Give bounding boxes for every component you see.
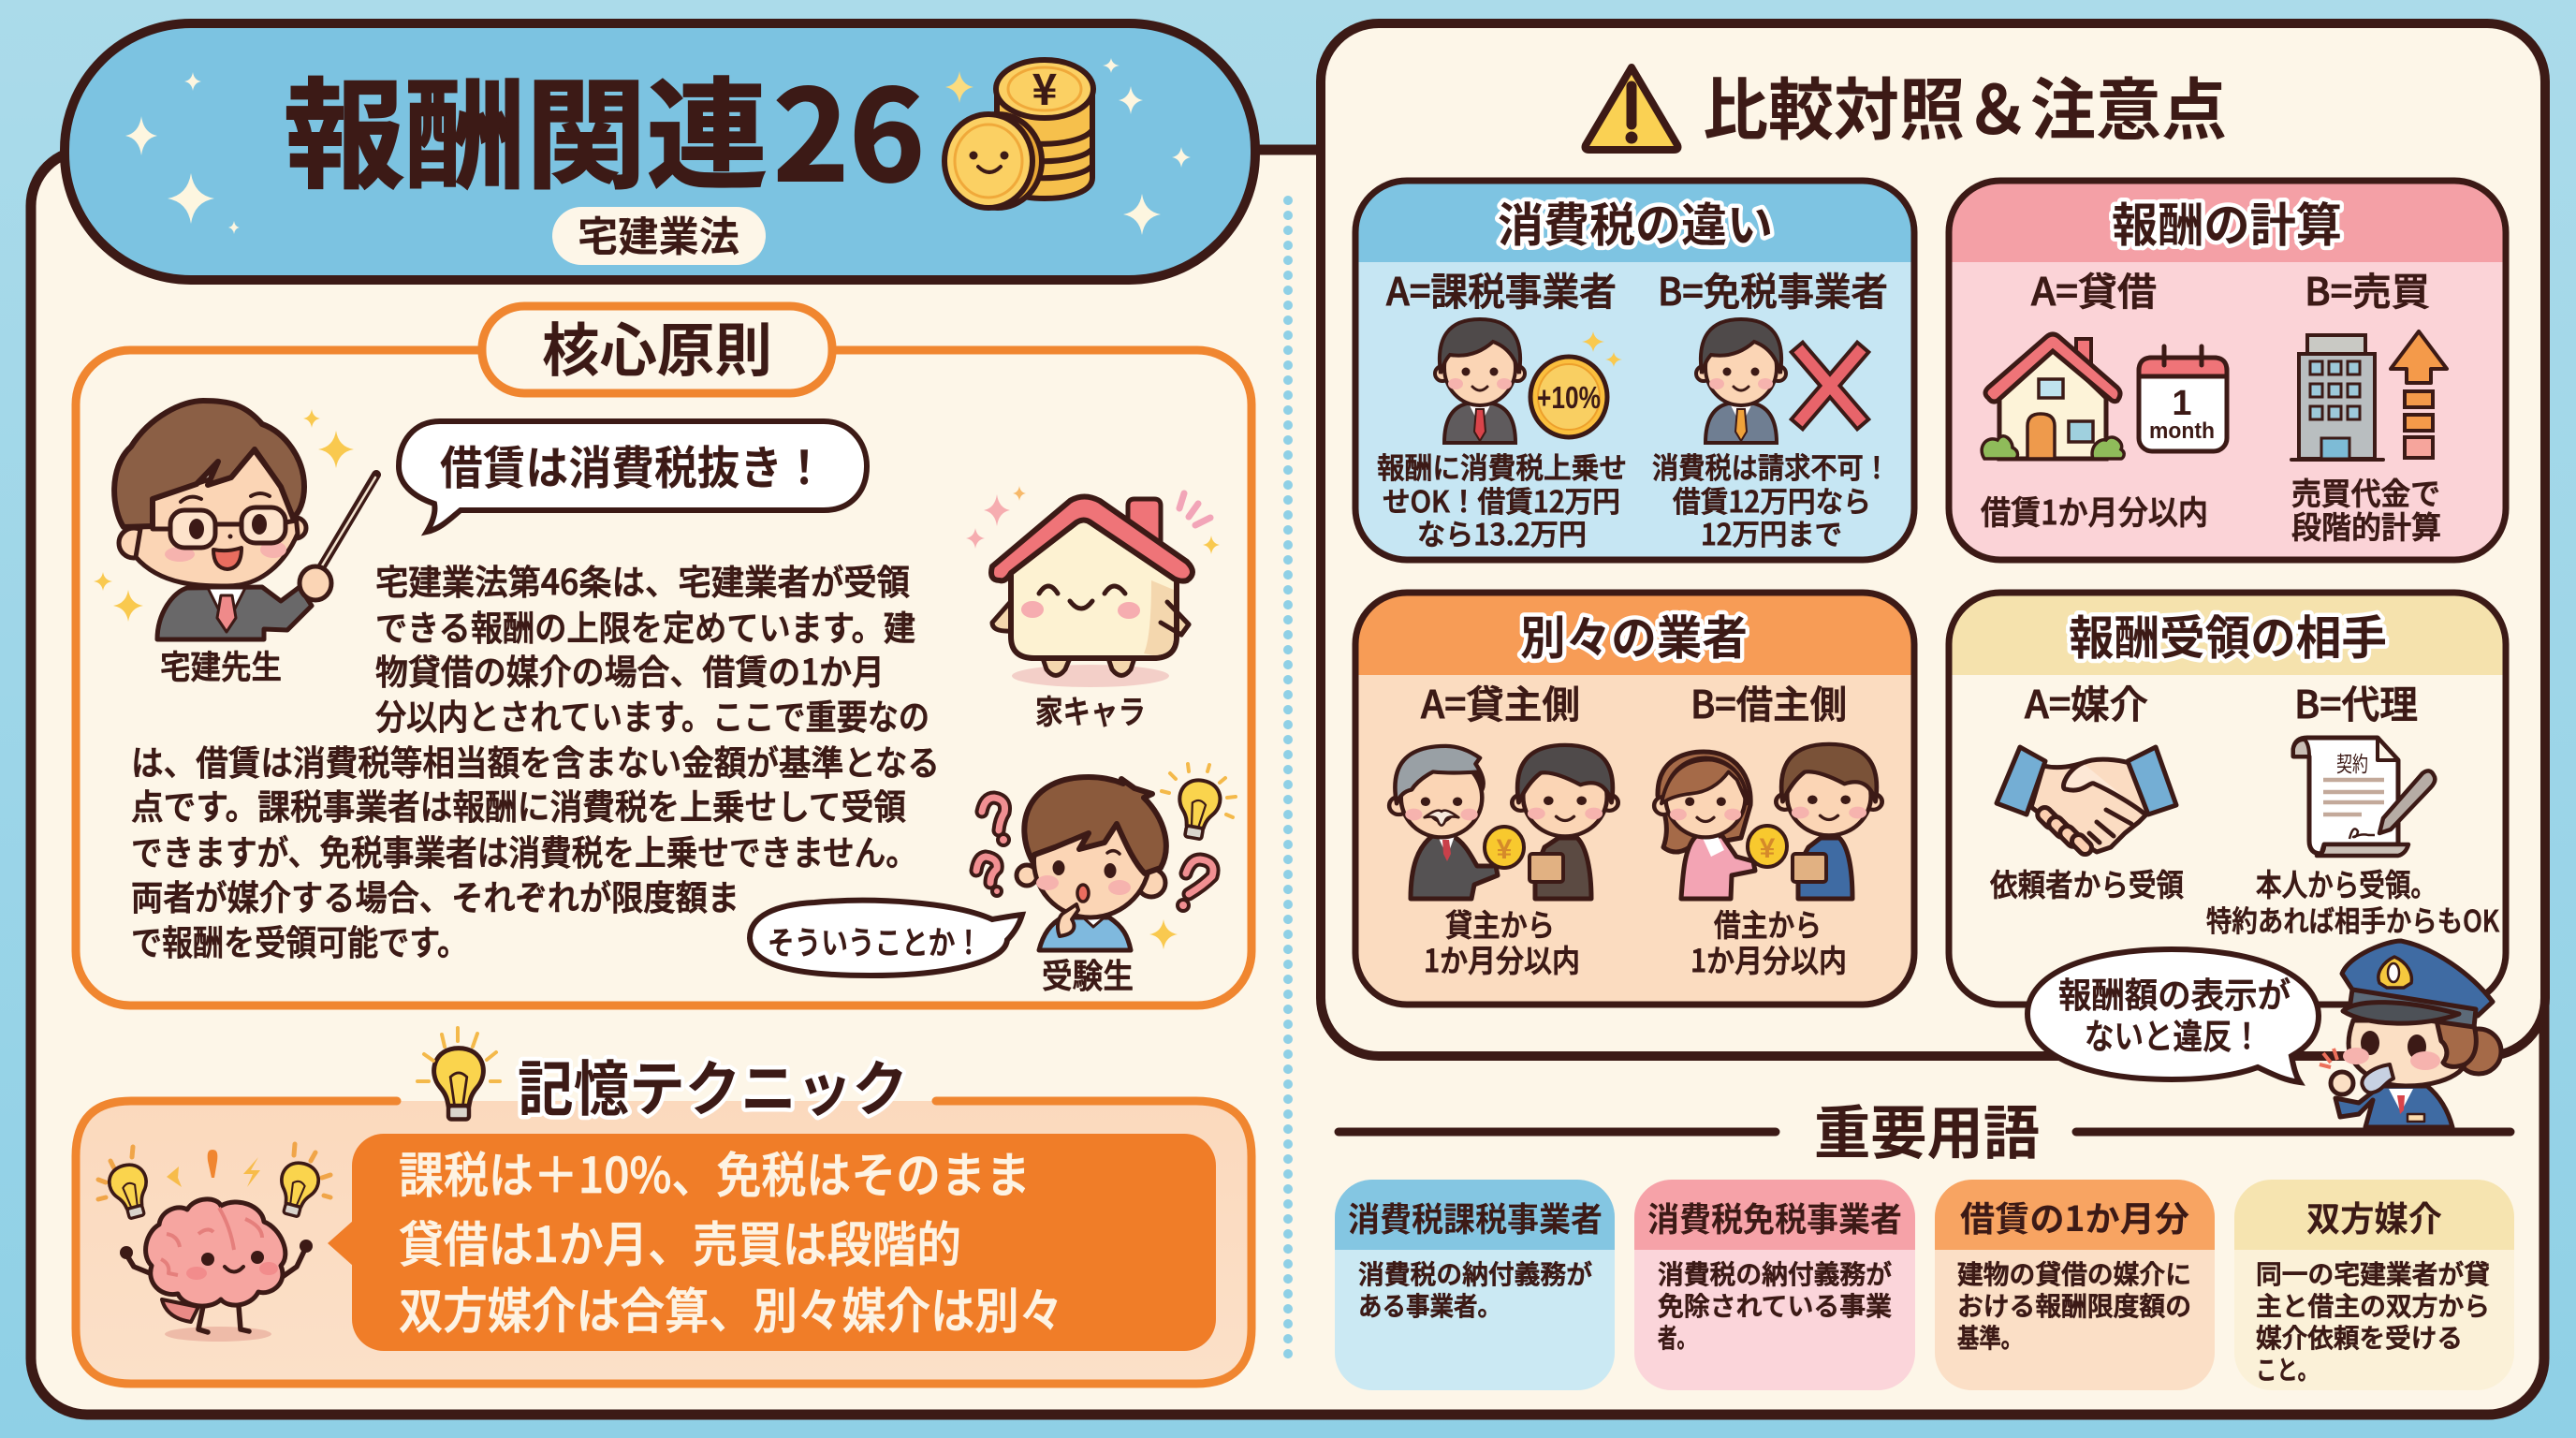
callout: mnemonic: 貸借は1か月、売買は段階的	[399, 1206, 961, 1276]
card: consumption tax: 12万円まで	[1701, 511, 1842, 553]
callout: display warning: 報酬額の表示が	[2058, 967, 2291, 1018]
card: one month rent term: 借賃の1か月分	[1960, 1191, 2189, 1241]
icon: coin stack: ¥	[1032, 56, 1058, 118]
text: core principle body: できる報酬の上限を定めています。建	[375, 600, 915, 651]
card: consumption tax: A=課税事業者	[1386, 260, 1617, 316]
heading: key terms: 重要用語	[1814, 1086, 2040, 1170]
character: student	[976, 764, 1236, 998]
callout: rent is tax-exclusive	[399, 421, 867, 532]
callout: mnemonic: 双方媒介は合算、別々媒介は別々	[399, 1272, 1063, 1343]
icon: contract and pen	[2293, 738, 2435, 856]
callout: mnemonic	[328, 1134, 1216, 1351]
card: dual agency term: こと。	[2256, 1350, 2319, 1387]
card: fee calculation: B=売買	[2305, 260, 2430, 316]
icon: tenant and agent	[1654, 744, 1882, 899]
icon: handshake	[1997, 747, 2176, 857]
label: student: 受験生	[1042, 949, 1134, 998]
card: one month rent term: 基準。	[1957, 1318, 2023, 1356]
card: consumption tax: 消費税は請求不可！	[1652, 445, 1890, 487]
icon: taxable man	[1435, 319, 1525, 443]
card: exempt business term: 者。	[1658, 1318, 1696, 1356]
card: separate agents: 1か月分以内	[1424, 936, 1580, 981]
card: one month rent term	[1935, 1180, 2215, 1390]
heading: memory technique: 記憶テクニック	[518, 1042, 908, 1128]
icon: warning	[1586, 67, 1677, 150]
card: separate agents: 1か月分以内	[1690, 936, 1847, 981]
callout: rent is tax-exclusive: 借賃は消費税抜き！	[440, 432, 826, 498]
card: exempt business term	[1634, 1180, 1915, 1390]
text: core principle body: できますが、免税事業者は消費税を上乗せできません。	[131, 825, 917, 875]
header: title banner	[65, 23, 1255, 280]
card: taxable business term: 消費税の納付義務が	[1358, 1255, 1592, 1292]
callout: display warning: ないと違反！	[2085, 1008, 2261, 1059]
heading: core principle: 核心原則	[542, 303, 772, 388]
text: core principle body: 物貸借の媒介の場合、借賃の1か月	[375, 644, 885, 695]
panel: core principle	[76, 303, 1251, 1005]
icon: house	[1982, 334, 2124, 459]
character: house	[966, 486, 1220, 734]
heading: memory technique	[417, 1028, 908, 1128]
callout: mnemonic: 課税は＋10%、免税はそのまま	[399, 1137, 1031, 1207]
icon: plus ten percent coin	[1530, 331, 1622, 437]
label: teacher: 宅建先生	[160, 641, 282, 689]
callout: display warning	[2027, 949, 2319, 1082]
callout: student realisation	[750, 901, 1022, 976]
icon: landlord and agent: ¥	[1497, 834, 1513, 865]
card: one month rent term: おける報酬限度額の	[1957, 1286, 2191, 1324]
card: exempt business term: 免除されている事業	[1658, 1286, 1892, 1324]
icon: cross	[1802, 353, 1858, 418]
card: exempt business term: 消費税の納付義務が	[1658, 1255, 1892, 1292]
title: 26	[773, 36, 925, 217]
heading: core principle	[482, 303, 832, 393]
card: taxable business term: 消費税課税事業者	[1348, 1193, 1603, 1241]
card: taxable business term	[1335, 1180, 1615, 1390]
divider: dotted line	[1283, 200, 1293, 1361]
heading: comparison: 比較対照＆注意点	[1703, 55, 2227, 154]
panel: memory technique	[76, 1028, 1251, 1384]
card: fee calculation: 売買代金で	[2291, 469, 2440, 514]
card: fee recipient: B=代理	[2294, 673, 2418, 729]
card: consumption tax: B=免税事業者	[1658, 260, 1888, 316]
card: one month rent term: 建物の貸借の媒介に	[1957, 1255, 2191, 1292]
text: core principle body: 点です。課税事業者は報酬に消費税を上乗せして受領	[131, 779, 906, 829]
card: taxable business term: ある事業者。	[1358, 1286, 1501, 1324]
card: consumption tax: せOK！借賃12万円	[1383, 478, 1620, 521]
card: fee recipient: 特約あれば相手からもOK	[2206, 898, 2499, 940]
card: consumption tax: 報酬に消費税上乗せ	[1377, 445, 1627, 487]
card: separate agents	[1355, 593, 1914, 1005]
card: fee recipient: 依頼者から受領	[1990, 860, 2184, 905]
character: police officer	[2320, 941, 2501, 1127]
icon: coin stack	[944, 56, 1093, 208]
text: core principle body: 分以内とされています。ここで重要なの	[375, 689, 929, 740]
card: separate agents: A=貸主側	[1421, 673, 1580, 729]
card: fee calculation: A=貸借	[2031, 260, 2157, 316]
text: core principle body: は、借賃は消費税等相当額を含まない金額が基準となる	[131, 735, 940, 785]
icon: contract and pen: 契約	[2336, 752, 2368, 776]
icon: up arrow with steps	[2391, 331, 2447, 458]
card: separate agents: 借主から	[1714, 901, 1822, 946]
icon: calendar: month	[2149, 418, 2215, 444]
card: separate agents: 貸主から	[1445, 901, 1555, 946]
icon: sparkles	[125, 58, 1191, 235]
panel: comparison	[1321, 23, 2545, 1056]
text: core principle body	[131, 554, 940, 965]
character: teacher	[94, 401, 376, 689]
card: fee calculation: 段階的計算	[2291, 503, 2441, 548]
title: 報酬関連	[284, 39, 768, 213]
card: dual agency term: 双方媒介	[2306, 1191, 2442, 1241]
card: dual agency term	[2234, 1180, 2514, 1390]
icon: calendar	[2139, 346, 2227, 451]
subtitle pill: 宅建業法	[578, 203, 739, 263]
card: consumption tax	[1355, 181, 1914, 560]
card: dual agency term: 媒介依頼を受ける	[2256, 1318, 2463, 1356]
icon: tenant and agent: ¥	[1760, 833, 1776, 864]
card: separate agents: 別々の業者	[1520, 601, 1748, 668]
text: core principle body: で報酬を受領可能です。	[131, 915, 468, 965]
text: core principle body: 宅建業法第46条は、宅建業者が受領	[375, 554, 910, 605]
card: dual agency term: 主と借主の双方から	[2256, 1286, 2490, 1324]
icon: exempt man	[1696, 319, 1786, 443]
card: fee calculation: 報酬の計算	[2112, 188, 2342, 256]
card: dual agency term: 同一の宅建業者が貸	[2256, 1255, 2490, 1292]
card: separate agents: B=借主側	[1690, 673, 1847, 729]
card: fee recipient	[1949, 593, 2506, 1005]
card: consumption tax: なら13.2万円	[1417, 511, 1587, 553]
callout: student realisation: そういうことか！	[768, 917, 982, 963]
card: fee recipient: 報酬受領の相手	[2069, 601, 2387, 668]
icon: brain	[98, 1144, 330, 1342]
icon: question marks	[976, 798, 1213, 911]
card: exempt business term: 消費税免税事業者	[1647, 1193, 1902, 1241]
card: fee calculation: 借賃1か月分以内	[1981, 487, 2208, 535]
card: consumption tax: 消費税の違い	[1498, 188, 1773, 256]
icon: calendar: 1	[2172, 384, 2192, 423]
icon: landlord and agent	[1389, 745, 1618, 899]
label: house: 家キャラ	[1035, 686, 1146, 734]
card: fee recipient: A=媒介	[2025, 673, 2148, 729]
card: fee calculation	[1949, 181, 2506, 560]
icon: plus ten percent coin: +10%	[1537, 380, 1601, 415]
card: fee recipient: 本人から受領。	[2256, 860, 2437, 905]
card: consumption tax: 借賃12万円なら	[1673, 478, 1871, 521]
text: core principle body: 両者が媒介する場合、それぞれが限度額ま	[131, 870, 739, 920]
icon: building	[2291, 335, 2383, 460]
